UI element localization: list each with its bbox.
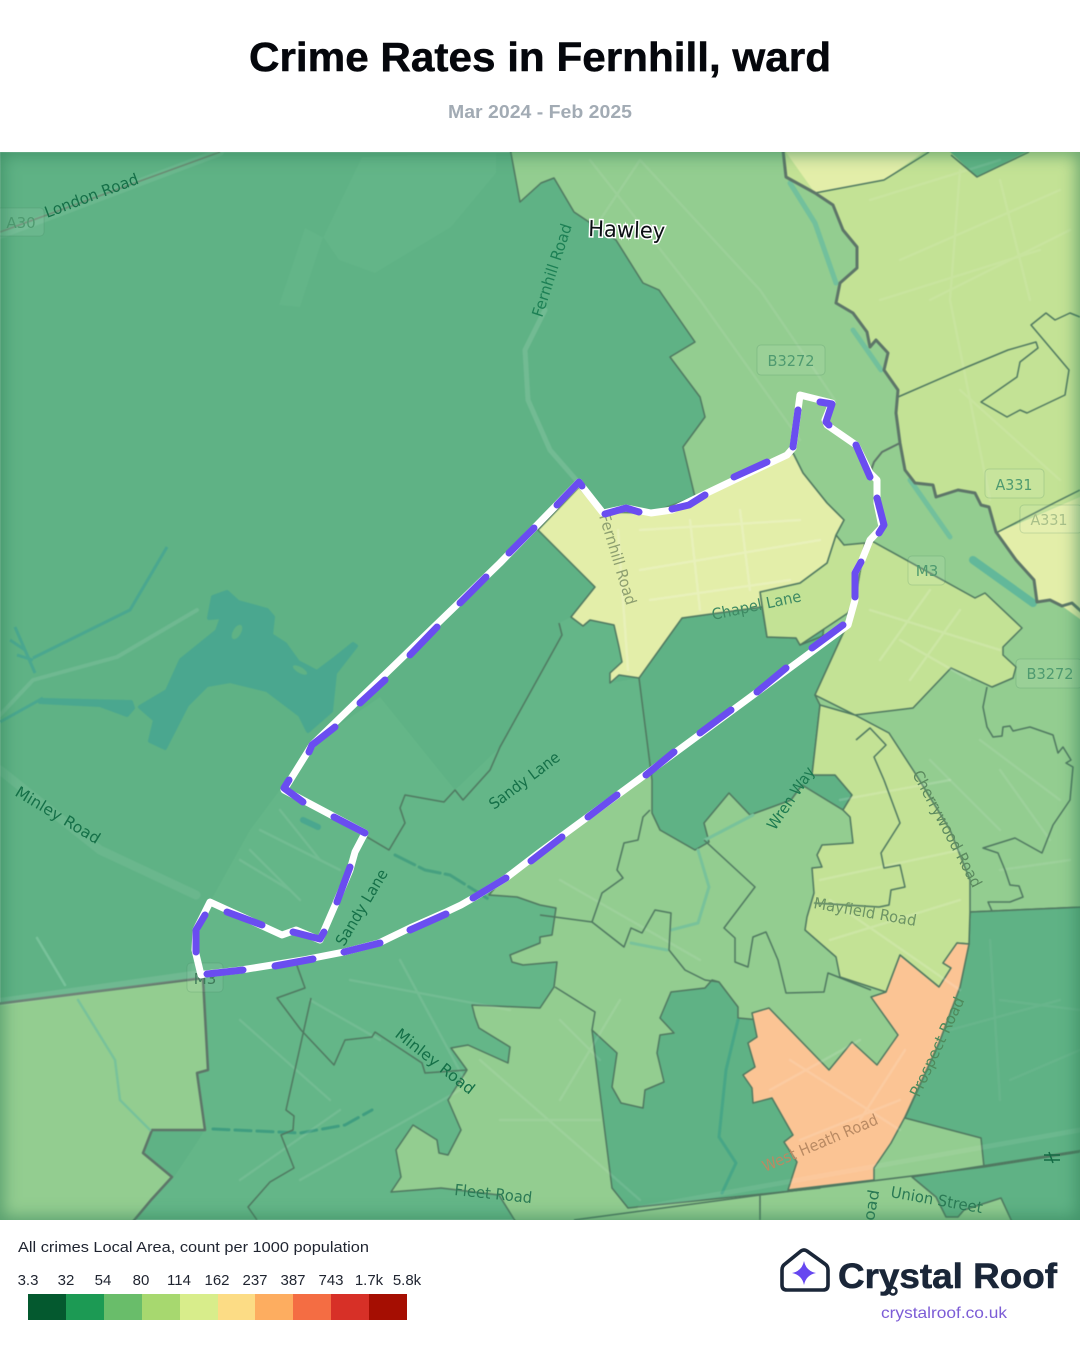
area: Fernhill ward core pale yellow: [538, 453, 844, 683]
road labels: Mayfield Road: [812, 894, 918, 930]
road labels: Cherrywood Road: [908, 767, 985, 891]
road labels: London Road: [42, 170, 141, 222]
river boundary thick line: [783, 150, 1080, 612]
road labels: Sandy Lane: [486, 748, 563, 813]
road badges: [0, 208, 1080, 992]
rivers and canal: [37, 183, 1033, 1193]
legend scale values: 32: [58, 1272, 74, 1289]
area: West Heath Road high-crime orange: [743, 943, 969, 1190]
area: dark green central: [639, 607, 852, 850]
legend title: All crimes Local Area, count per 1000 population: [18, 1239, 369, 1256]
road network: [0, 152, 1080, 1208]
area: central-south light green: [390, 696, 1010, 1220]
area: south-west light green: [0, 978, 208, 1225]
area: dark green south: [592, 980, 820, 1208]
legend scale values: 162: [204, 1272, 230, 1289]
road labels: [12, 170, 985, 1233]
area: dark green south-east: [905, 907, 1080, 1167]
road labels: Chapel Lane: [710, 587, 803, 624]
legend scale values: 1.7k: [355, 1272, 384, 1289]
road badges: A331: [996, 476, 1032, 494]
area: Mayfield Road yellow-green: [805, 705, 970, 992]
road badges: M3: [916, 562, 938, 580]
road labels: Minley Road: [392, 1025, 478, 1098]
legend scale values: 114: [167, 1272, 191, 1289]
road labels: Minley Road: [12, 783, 103, 848]
ward boundary: Fernhill: [195, 395, 884, 975]
road labels: Prospect Road: [906, 994, 968, 1100]
road labels: Fleet Road: [454, 1181, 533, 1207]
legend scale values: 80: [133, 1272, 149, 1289]
area: Hawley and east light green: [510, 148, 1080, 912]
area: Chapel Lane yellow-green: [760, 535, 865, 645]
subtitle: date range: Mar 2024 - Feb 2025: [448, 102, 632, 122]
area: north-east yellow-green: [783, 148, 1080, 532]
area: east of ward yellow-green: [815, 540, 1022, 715]
legend scale values: 5.8k: [393, 1272, 422, 1289]
area boundary lines: [248, 152, 1080, 1220]
road labels: West Heath Road: [760, 1111, 881, 1176]
road badges: A30: [6, 214, 36, 232]
legend scale values: 54: [95, 1272, 111, 1289]
legend scale values: [18, 1272, 422, 1289]
road labels: Wren Way: [763, 763, 819, 833]
website link text: crystalroof.co.uk: [881, 1305, 1008, 1322]
road labels: Fernhill Road: [595, 512, 640, 607]
legend colour bar: [28, 1294, 407, 1320]
legend scale values: 387: [280, 1272, 306, 1289]
place label: Hawley: Hawley: [588, 217, 666, 245]
road labels: Union Street: [889, 1183, 984, 1217]
road labels: Fernhill Road: [529, 221, 576, 319]
legend scale values: 743: [318, 1272, 344, 1289]
road labels: Road: [858, 1188, 883, 1233]
water: lake: [0, 547, 356, 748]
road badges: A331: [1030, 511, 1068, 529]
legend scale values: 3.3: [18, 1272, 38, 1289]
icon: house with star: [782, 1250, 828, 1290]
road labels: Sandy Lane: [332, 866, 392, 949]
title: Crime Rates in Fernhill, ward: [249, 34, 831, 80]
logo: Crystal Roof: Crystal Roof: [838, 1257, 1057, 1296]
icon: railway station: [1044, 1152, 1060, 1163]
logo: Crystal Roof: [782, 1250, 1057, 1296]
road badges: B3272: [768, 352, 814, 370]
road badges: B3272: [1026, 665, 1074, 683]
legend scale values: 237: [242, 1272, 268, 1289]
road badges: M3: [194, 970, 216, 988]
